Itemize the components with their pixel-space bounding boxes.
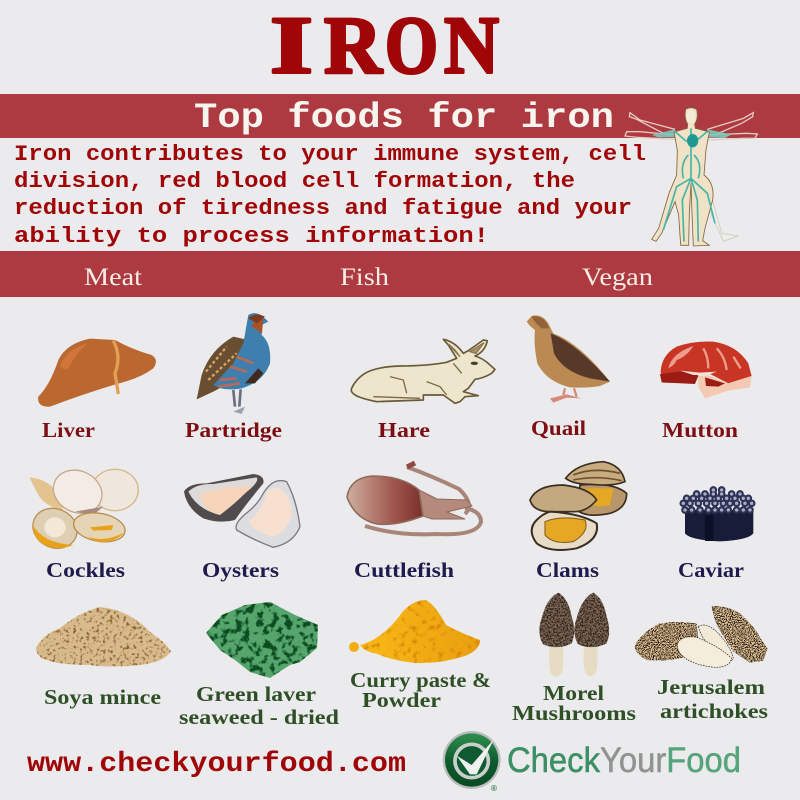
label: jerusalem artichokes bbox=[657, 675, 768, 723]
website url: www.checkyourfood.com bbox=[27, 749, 406, 780]
title: I bbox=[270, 0, 313, 90]
intro text block: ability to process information! bbox=[14, 224, 489, 249]
label: caviar: Caviar bbox=[678, 558, 744, 582]
heading banner bbox=[0, 94, 800, 138]
icon: oysters bbox=[184, 474, 300, 547]
label: oysters: Oysters bbox=[202, 558, 279, 582]
category: meat: Meat bbox=[84, 264, 142, 291]
label: jerusalem artichokes: artichokes bbox=[660, 699, 768, 723]
label: quail: Quail bbox=[531, 416, 586, 440]
label: morel mushrooms: Mushrooms bbox=[512, 701, 636, 725]
intro text block: division, red blood cell formation, the bbox=[14, 169, 575, 194]
label: partridge: Partridge bbox=[185, 418, 282, 442]
label: green laver seaweed: Green laver bbox=[196, 682, 316, 706]
icon: hare bbox=[351, 339, 495, 403]
heading banner: Top foods for iron bbox=[194, 98, 614, 138]
intro text block: reduction of tiredness and fatigue and your bbox=[14, 196, 632, 221]
intro text block bbox=[14, 142, 646, 249]
title: N bbox=[444, 0, 499, 90]
label: green laver seaweed: seaweed - dried bbox=[179, 705, 339, 729]
label: curry paste and powder: Curry paste & bbox=[350, 668, 491, 692]
label: clams: Clams bbox=[536, 558, 599, 582]
category: vegan: Vegan bbox=[582, 264, 654, 291]
icon: human circulatory figure bbox=[625, 108, 757, 246]
title: R bbox=[324, 0, 383, 90]
icon: mutton bbox=[660, 342, 752, 398]
label: liver: Liver bbox=[42, 418, 95, 442]
icon: caviar bbox=[683, 490, 753, 541]
title bbox=[270, 0, 499, 90]
logo wordmark: CheckYourFood bbox=[507, 741, 741, 780]
icon: logo badge bbox=[443, 731, 501, 789]
icon: curry powder bbox=[349, 600, 480, 663]
label: soya mince: Soya mince bbox=[44, 685, 161, 709]
icon: clams bbox=[530, 462, 627, 550]
icon: cockles bbox=[26, 462, 138, 555]
registered mark: ® bbox=[491, 784, 497, 793]
icon: quail bbox=[527, 315, 610, 403]
icon: soya mince bbox=[36, 607, 171, 666]
label: curry paste and powder: Powder bbox=[362, 688, 441, 712]
title: O bbox=[385, 0, 438, 90]
intro text block: Iron contributes to your immune system, cell bbox=[14, 142, 646, 167]
label: jerusalem artichokes: Jerusalem bbox=[657, 675, 766, 699]
label: green laver seaweed bbox=[179, 682, 339, 729]
icon: green laver seaweed bbox=[206, 602, 318, 678]
label: morel mushrooms bbox=[512, 681, 636, 725]
label: mutton: Mutton bbox=[662, 418, 738, 442]
icon: jerusalem artichokes bbox=[634, 606, 768, 667]
icon: liver bbox=[38, 339, 156, 407]
icon: cuttlefish bbox=[347, 463, 481, 534]
icon: morel mushrooms bbox=[539, 593, 609, 676]
category: fish: Fish bbox=[340, 264, 390, 291]
category bar bbox=[0, 251, 800, 297]
icon: partridge bbox=[197, 313, 270, 414]
label: curry paste and powder bbox=[350, 668, 491, 712]
label: morel mushrooms: Morel bbox=[543, 681, 604, 705]
logo: CheckYourFood bbox=[443, 731, 741, 793]
label: cuttlefish: Cuttlefish bbox=[354, 558, 454, 582]
label: hare: Hare bbox=[378, 418, 430, 442]
label: cockles: Cockles bbox=[46, 558, 125, 582]
